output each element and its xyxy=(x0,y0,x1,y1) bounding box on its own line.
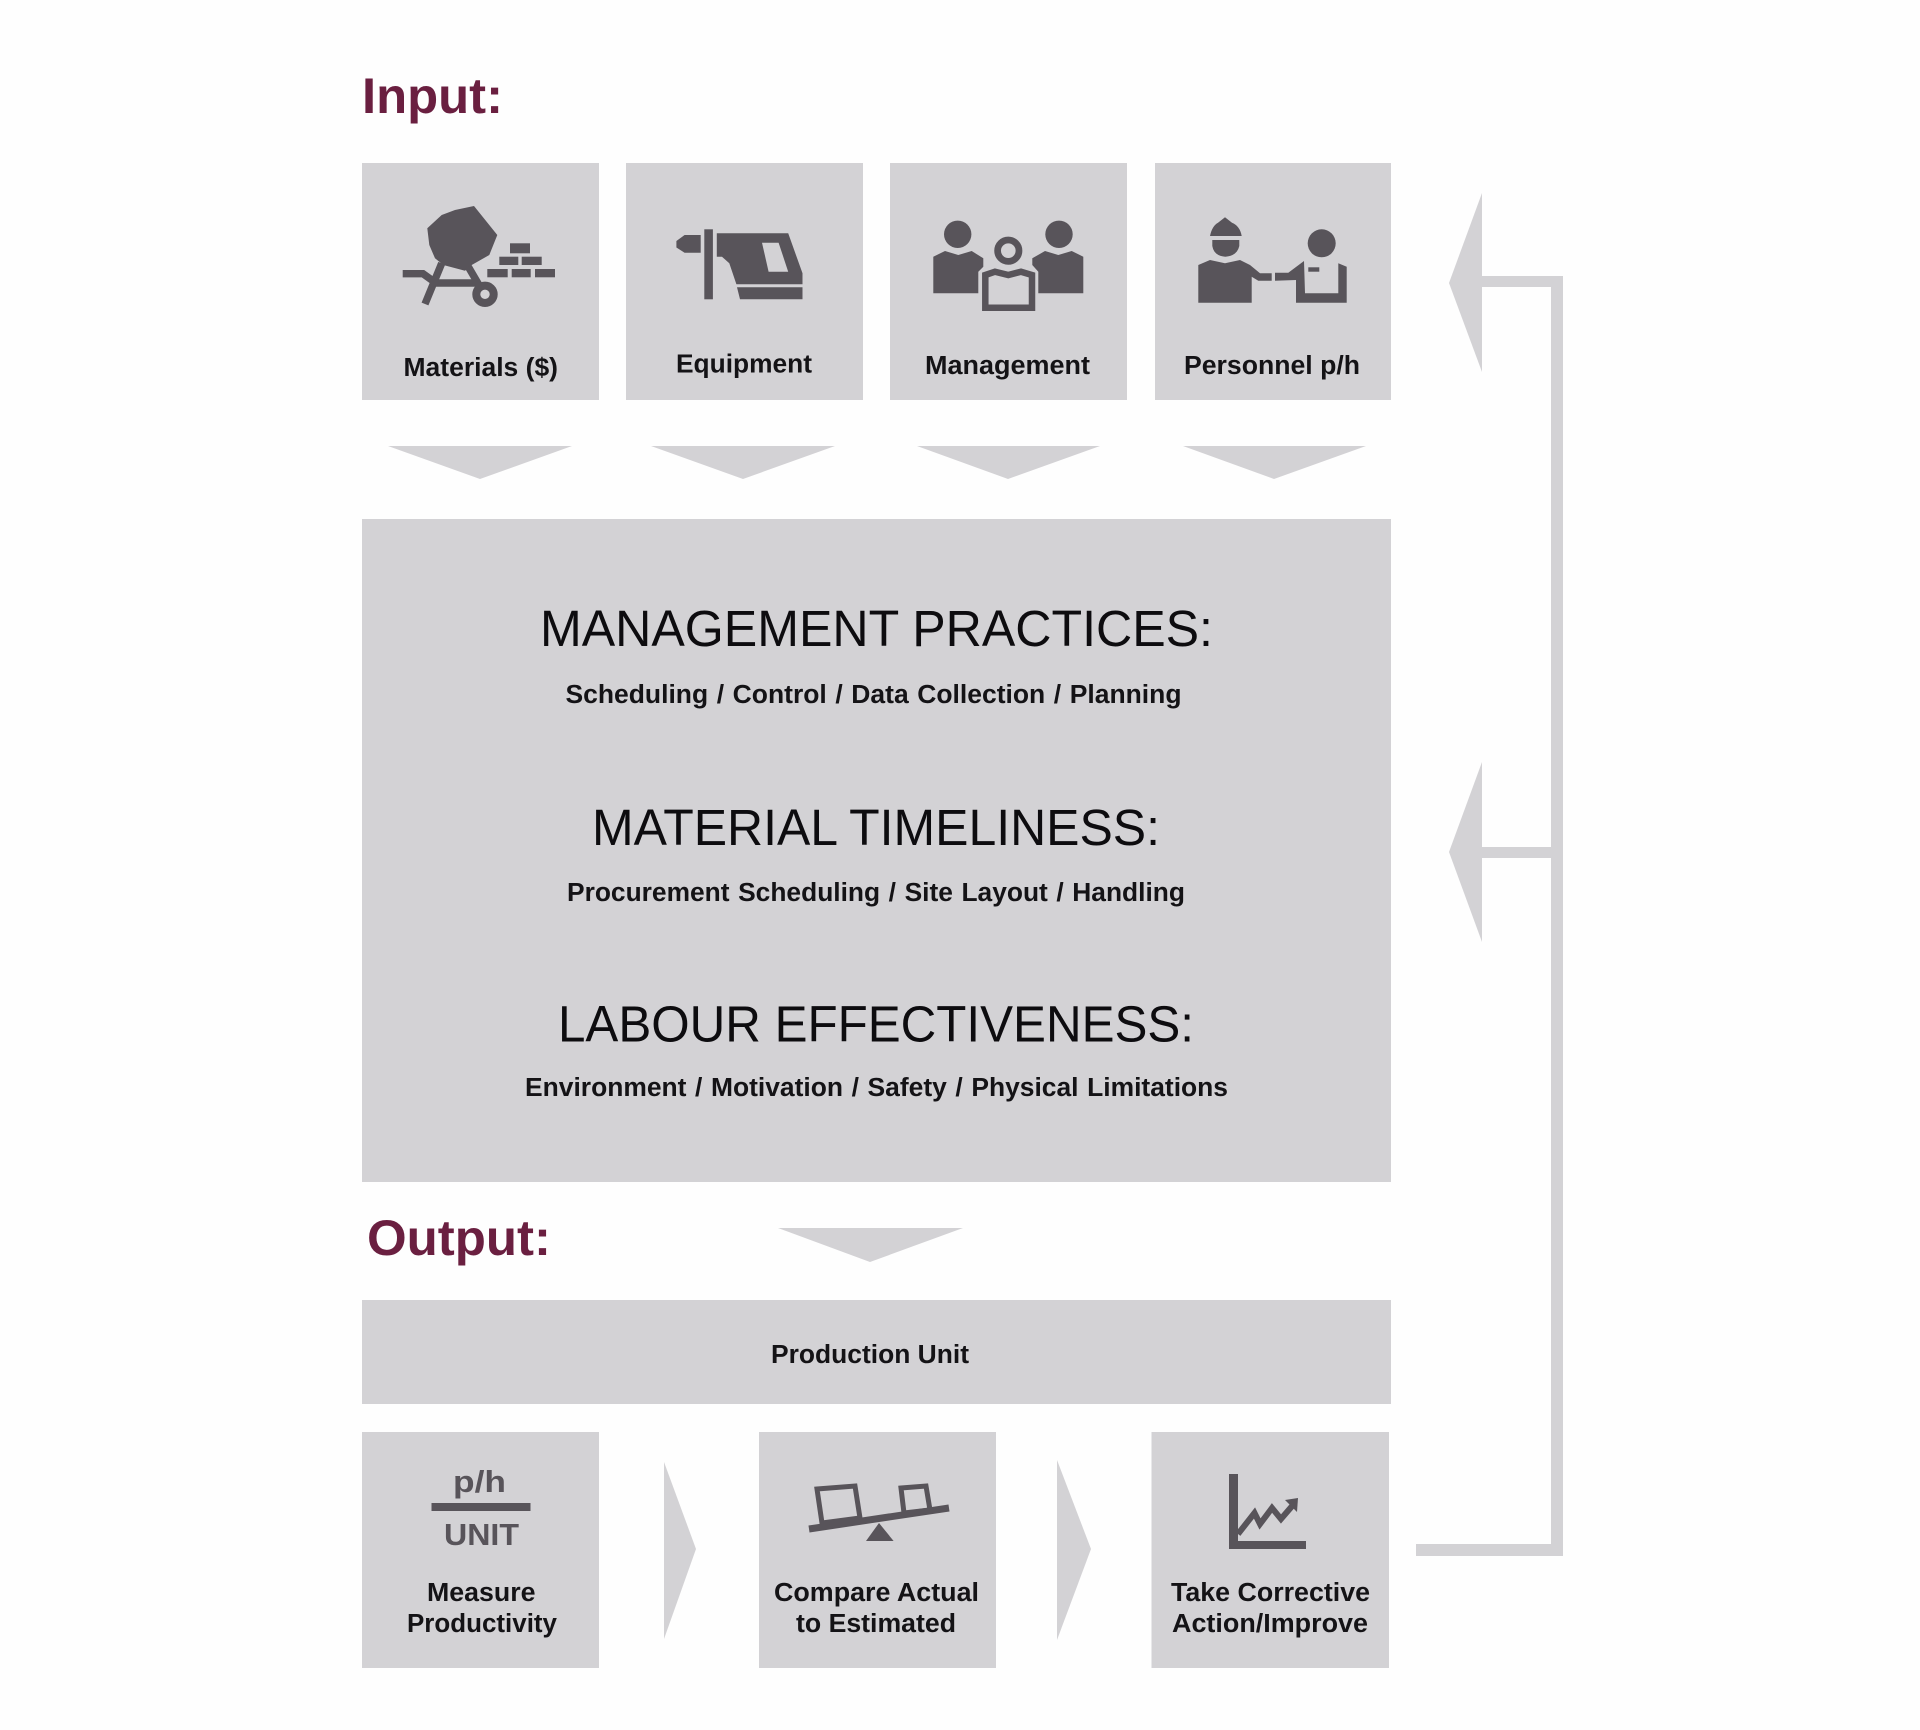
label: Take Corrective Action xyxy=(1171,1579,1370,1638)
icon: drill xyxy=(676,229,802,299)
icon: cement mixer and bricks xyxy=(403,206,555,304)
label: Equipment: Equipment xyxy=(676,350,813,378)
label: Measure Productivity: Productivity xyxy=(407,1610,558,1638)
arrow: feedback loop xyxy=(1416,193,1563,1556)
label: Take Corrective Action: Take Corrective xyxy=(1171,1579,1370,1607)
arrow: right to Compare xyxy=(664,1462,696,1639)
label: Compare Actual to Estimated: to Estimated xyxy=(796,1610,956,1638)
icon: group of managers xyxy=(933,221,1083,308)
heading: Material Timeliness: MATERIAL TIMELINESS: xyxy=(592,799,1160,856)
panel: Corrective Action card xyxy=(1152,1432,1389,1668)
arrow: down from Personnel xyxy=(1183,446,1366,479)
icon: p/h over unit: UNIT xyxy=(444,1517,519,1552)
panel: factors xyxy=(362,519,1391,1182)
text: labour details: Environment / Motivation / Safety / Physical Limitations xyxy=(525,1074,1228,1102)
panel: Personnel card xyxy=(1155,163,1391,400)
arrow: down from Materials xyxy=(388,446,572,479)
label: Compare Actual to Estimated xyxy=(774,1579,979,1638)
icon: p/h over unit: p/h xyxy=(453,1464,506,1499)
arrow: down from Equipment xyxy=(651,446,835,479)
heading: Labour Effectiveness: LABOUR EFFECTIVENESS: xyxy=(558,996,1194,1052)
icon: rising chart xyxy=(1229,1474,1306,1549)
label: Production Unit: Production Unit xyxy=(771,1341,970,1369)
panel: Materials card xyxy=(362,163,599,400)
text: material details: Procurement Scheduling / Site Layout / Handling xyxy=(567,879,1185,907)
heading: Input: Input: xyxy=(362,68,503,124)
label: Personnel: Personnel p/h xyxy=(1184,352,1360,380)
label: Compare Actual to Estimated: Compare Actual xyxy=(774,1579,979,1607)
text: management details: Scheduling / Control / Data Collection / Planning xyxy=(566,681,1182,709)
heading: Management Practices: MANAGEMENT PRACTICES: xyxy=(540,600,1213,657)
panel: Compare card xyxy=(759,1432,996,1668)
panel: Production Unit xyxy=(362,1300,1391,1404)
label: Take Corrective Action: Action/Improve xyxy=(1172,1610,1368,1638)
icon: worker shaking hands with manager xyxy=(1198,217,1347,303)
label: Materials: Materials ($) xyxy=(404,354,558,382)
label: Measure Productivity xyxy=(407,1579,558,1638)
heading: Output: Output: xyxy=(367,1210,551,1266)
label: Measure Productivity: Measure xyxy=(427,1579,536,1607)
arrow: down from Management xyxy=(917,446,1100,479)
panel: Equipment card xyxy=(626,163,863,400)
arrow: down to Production Unit xyxy=(778,1228,963,1262)
panel: Measure Productivity card xyxy=(362,1432,599,1668)
label: Management: Management xyxy=(925,352,1091,380)
icon: balance scale xyxy=(809,1486,949,1541)
panel: Management card xyxy=(890,163,1127,400)
icon: p/h over unit xyxy=(432,1464,530,1552)
arrow: right to Corrective Action xyxy=(1057,1460,1091,1640)
